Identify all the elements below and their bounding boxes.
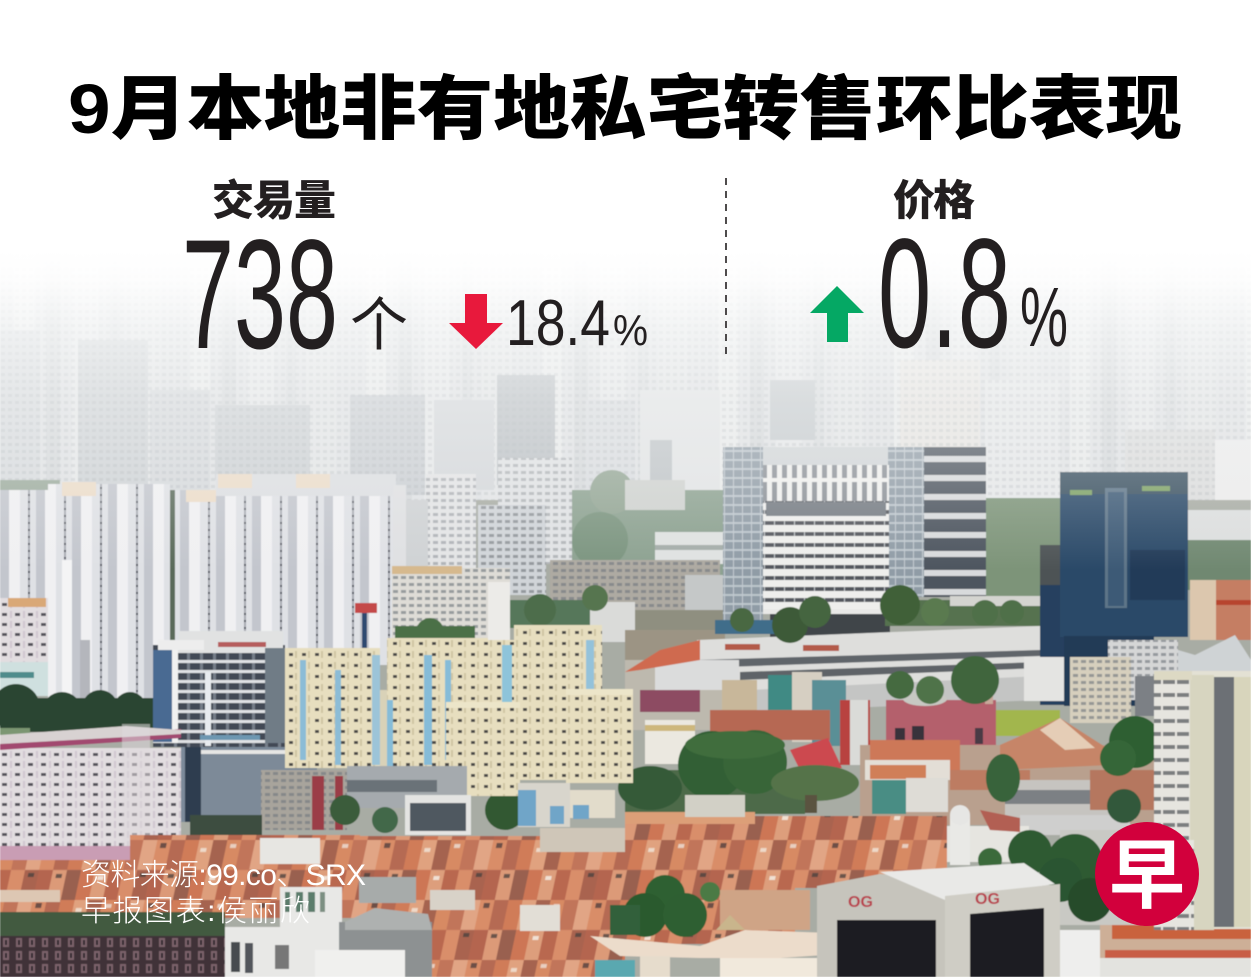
left trees <box>0 684 155 740</box>
title: 9月本地非有地私宅转售环比表现 <box>68 70 1182 148</box>
grey and white foreground buildings <box>225 877 432 977</box>
unit: 个: 个 <box>350 293 408 358</box>
heading: price: 价格 <box>893 177 975 224</box>
OG building <box>817 863 1100 977</box>
icon: green up arrow <box>810 286 864 342</box>
source credits: 资料来源:99.co、SRX <box>81 859 366 892</box>
haze over skyline <box>0 230 1251 570</box>
central low-rise cluster <box>625 640 870 770</box>
photo: city skyline <box>0 240 1251 977</box>
logo: Zaobao: 早 <box>1109 834 1185 919</box>
cream and blue apartment blocks <box>285 625 633 796</box>
right mid-rise cluster <box>1024 580 1251 723</box>
distant hazy towers <box>0 240 1251 540</box>
pink-trimmed public housing block <box>0 724 181 860</box>
change: 18.4 percent: % <box>613 306 648 355</box>
orange shophouse roofs centre <box>0 795 1251 977</box>
source credits <box>81 859 366 928</box>
icon: red down arrow <box>449 294 503 349</box>
figure: 738: 738 <box>182 208 338 382</box>
figure: 0.8 percent: 0.8 <box>878 207 1011 381</box>
white pavilion roof <box>590 915 860 977</box>
change: 18.4 percent: 18.4 <box>506 286 610 359</box>
construction crane <box>355 603 377 658</box>
white public housing blocks <box>0 474 428 704</box>
office tower <box>723 447 986 637</box>
heading: transaction volume: 交易量 <box>212 177 336 224</box>
figure: 0.8 percent: % <box>1020 270 1068 364</box>
grey low-rise, red-brick block and blue blocks <box>190 766 615 840</box>
trees: central canopy <box>485 656 1161 830</box>
green hillside patches <box>0 470 1251 598</box>
dark glass hotel tower <box>1040 472 1188 706</box>
base tone of the built-up city <box>0 500 1251 977</box>
low-rise block and left block <box>0 566 510 696</box>
shopping mall podium with rooftop trees <box>697 585 1040 712</box>
logo: Zaobao <box>1095 822 1199 926</box>
mid-distance residential towers <box>426 458 725 665</box>
divider <box>725 178 727 356</box>
right metric: price <box>810 177 1068 381</box>
OG building: OG <box>848 894 873 911</box>
source credits: 早报图表:侯丽欣 <box>81 895 310 928</box>
left metric: transaction volume <box>182 177 648 382</box>
blue-striped hotel and podium <box>153 631 317 822</box>
white mosque tower and right-side houses <box>945 805 1029 865</box>
orange shophouse roofs far right <box>860 718 1160 835</box>
tall right apartment tower <box>1154 671 1251 930</box>
trees: foreground <box>610 830 1154 937</box>
OG building: OG <box>975 891 1000 908</box>
pink heritage hall and lawn <box>886 692 1060 746</box>
